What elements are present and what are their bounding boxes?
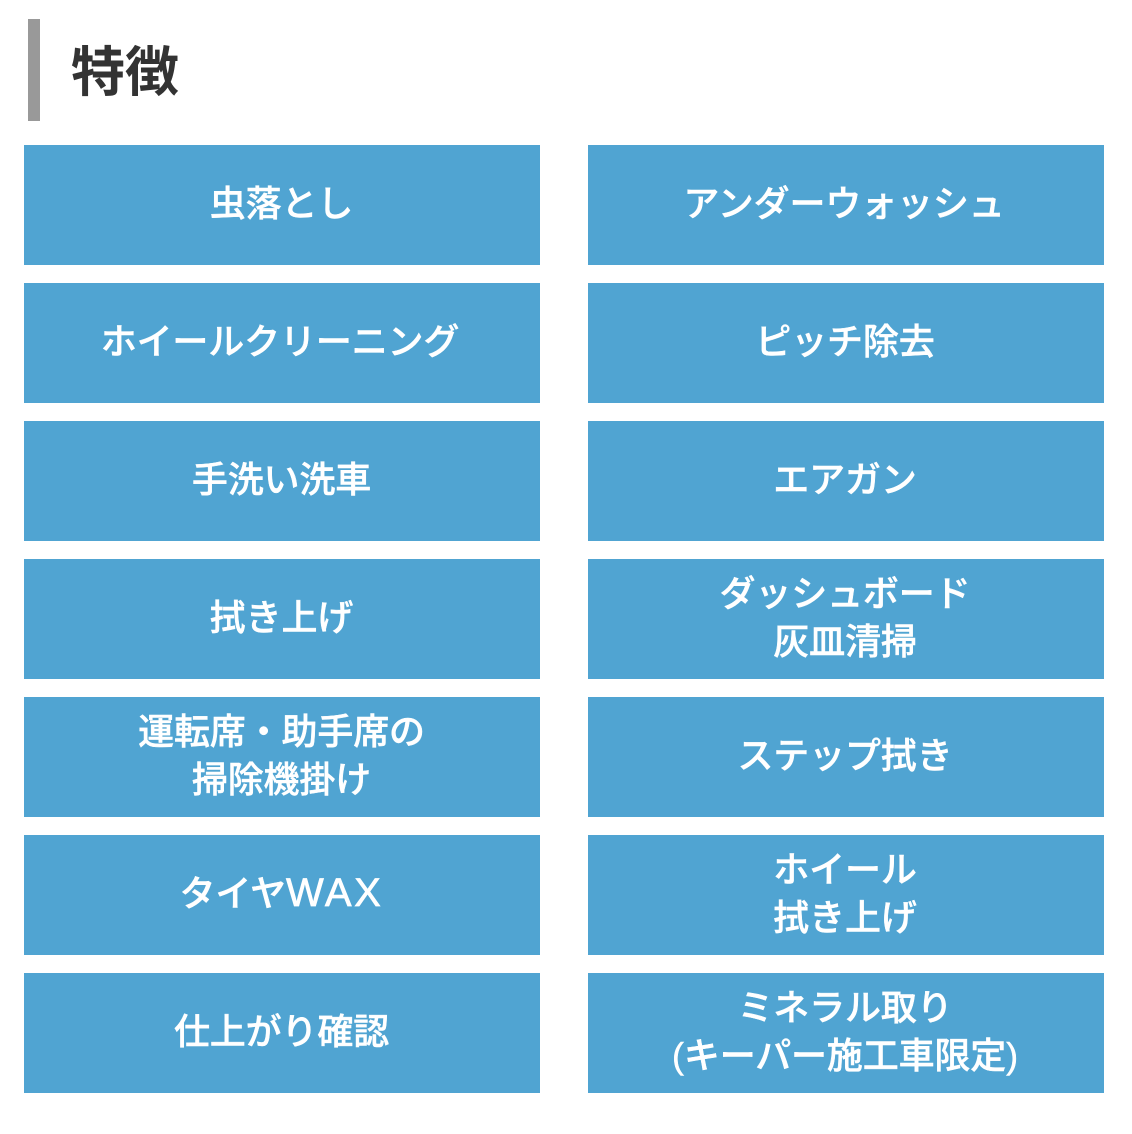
feature: dashboard and ashtray cleaning: ダッシュボード	[720, 573, 970, 614]
feature: seat vacuuming	[24, 697, 540, 817]
title: 特徴	[71, 43, 179, 103]
feature: mineral removal: (キーパー施工車限定)	[672, 1035, 1018, 1076]
feature: pitch removal: ピッチ除去	[755, 321, 935, 362]
feature: dashboard and ashtray cleaning: 灰皿清掃	[773, 621, 917, 662]
feature: hand wash: 手洗い洗車	[192, 459, 371, 500]
feature: wipe-down	[24, 559, 540, 679]
feature: wheel wiping: 拭き上げ	[773, 897, 917, 938]
feature: wheel cleaning: ホイールクリーニング	[101, 321, 459, 362]
heading accent bar	[28, 19, 40, 121]
feature: wipe-down: 拭き上げ	[210, 597, 353, 638]
feature: dashboard and ashtray cleaning	[588, 559, 1104, 679]
feature: final check: 仕上がり確認	[174, 1011, 389, 1052]
feature: air gun: エアガン	[773, 459, 917, 500]
feature: seat vacuuming: 掃除機掛け	[192, 759, 371, 800]
feature: tire wax	[24, 835, 540, 955]
feature: step wiping	[588, 697, 1104, 817]
feature: seat vacuuming: 運転席・助手席の	[138, 711, 425, 752]
feature: underwash: アンダーウォッシュ	[683, 183, 1005, 224]
feature: step wiping: ステップ拭き	[737, 735, 953, 776]
feature: hand wash	[24, 421, 540, 541]
feature: air gun	[588, 421, 1104, 541]
feature: pitch removal	[588, 283, 1104, 403]
feature: final check	[24, 973, 540, 1093]
feature: wheel wiping	[588, 835, 1104, 955]
feature: insect removal: 虫落とし	[210, 183, 353, 224]
feature: tire wax: タイヤWAX	[180, 871, 383, 915]
feature: wheel cleaning	[24, 283, 540, 403]
feature: mineral removal	[588, 973, 1104, 1093]
feature: insect removal	[24, 145, 540, 265]
feature: mineral removal: ミネラル取り	[737, 987, 953, 1028]
feature: wheel wiping: ホイール	[773, 849, 917, 890]
feature: underwash	[588, 145, 1104, 265]
